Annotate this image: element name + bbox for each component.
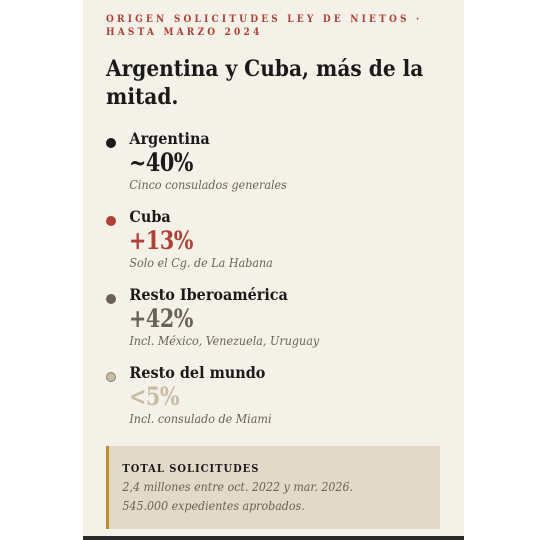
note: Argentina: Cinco consulados generales — [129, 177, 287, 192]
eyebrow heading: ORIGEN SOLICITUDES LEY DE NIETOS · — [106, 14, 422, 25]
item: Resto del mundo — [106, 363, 272, 426]
value: Resto del mundo: <5% — [129, 382, 179, 411]
value: Cuba: +13% — [129, 226, 193, 255]
value: Resto Iberoamérica: +42% — [129, 304, 193, 333]
callout accent bar — [106, 446, 109, 529]
value: Argentina: ~40% — [129, 148, 193, 177]
title: Argentina y Cuba, más de la — [106, 56, 423, 82]
eyebrow heading: HASTA MARZO 2024 — [106, 26, 262, 38]
label: Resto Iberoamérica: Resto Iberoamérica — [129, 285, 288, 304]
item: Cuba — [106, 207, 273, 270]
callout: total solicitudes — [106, 446, 440, 529]
item: Resto Iberoamérica — [106, 285, 320, 348]
eyebrow heading — [106, 14, 422, 38]
callout heading: TOTAL SOLICITUDES — [122, 462, 259, 475]
note: Cuba: Solo el Cg. de La Habana — [129, 255, 273, 270]
note: Resto Iberoamérica: Incl. México, Venezuela, Uruguay — [129, 333, 319, 348]
marker: Argentina — [106, 138, 116, 148]
label: Argentina: Argentina — [129, 129, 210, 148]
panel: background card — [83, 0, 464, 540]
label: Resto del mundo: Resto del mundo — [129, 363, 265, 382]
callout text — [122, 480, 353, 513]
bottom rule — [83, 536, 464, 540]
marker: Cuba — [106, 216, 116, 226]
note: Resto del mundo: Incl. consulado de Miami — [129, 411, 272, 426]
marker: Resto Iberoamérica — [106, 294, 116, 304]
item: Argentina — [106, 129, 287, 192]
title — [106, 56, 423, 110]
callout text: 545.000 expedientes aprobados. — [122, 499, 305, 513]
callout text: 2,4 millones entre oct. 2022 y mar. 2026. — [122, 480, 353, 494]
marker: Resto del mundo — [106, 372, 116, 382]
label: Cuba: Cuba — [129, 207, 171, 226]
title: mitad. — [106, 84, 178, 110]
